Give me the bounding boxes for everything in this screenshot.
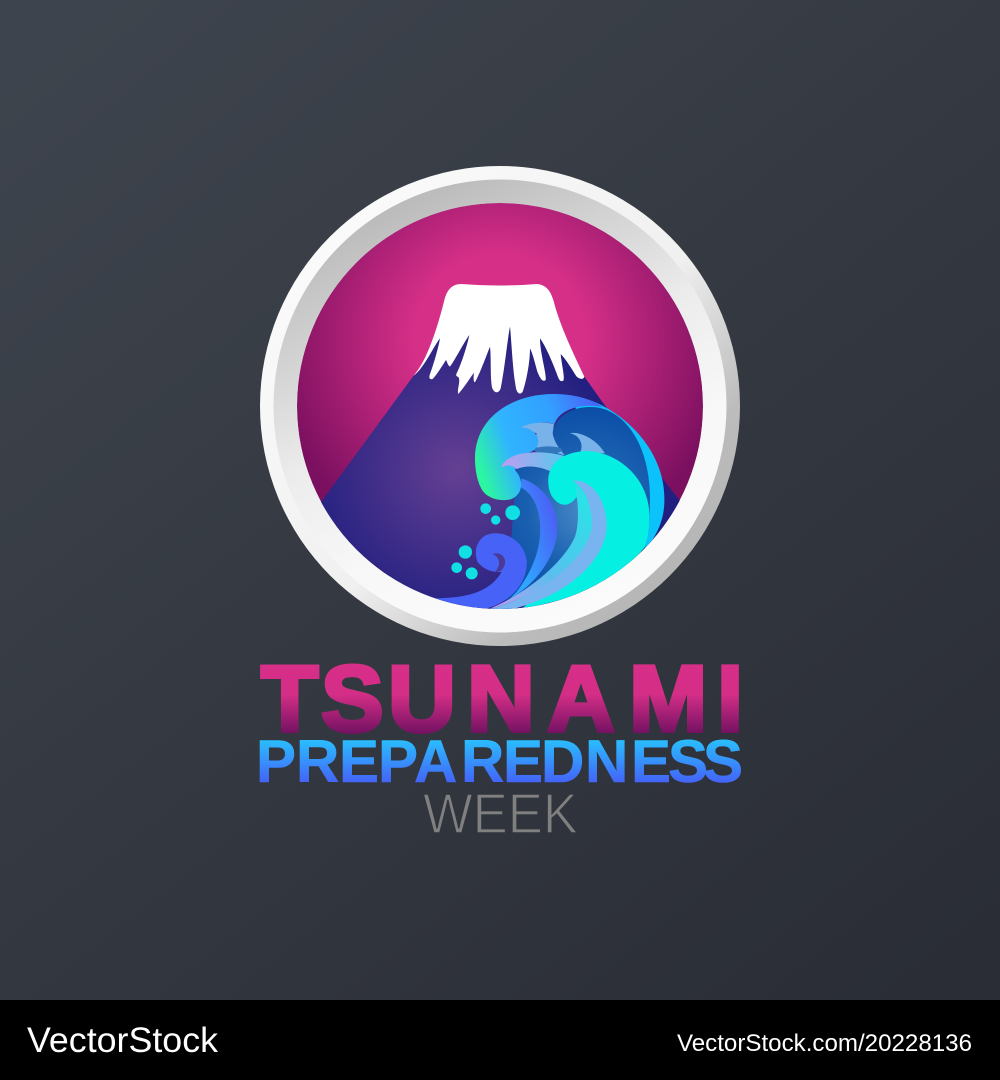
wave: small blue curl (433, 533, 527, 609)
spray dots (451, 503, 520, 579)
wave: lip shadow (534, 446, 562, 454)
wave: green to blue crest (475, 394, 603, 500)
wave: pale inner crest (570, 433, 605, 453)
wave: light blue strip (488, 481, 607, 609)
wave: front turquoise (520, 451, 649, 610)
snow cap (413, 284, 584, 394)
illustration disc (297, 203, 703, 637)
wave: deep blue body (507, 407, 650, 600)
footer brand: VectorStock (27, 1021, 219, 1060)
sky (297, 203, 703, 609)
title: preparedness: PREPAREDNESS (256, 728, 743, 795)
wave: turquoise strip (488, 484, 592, 609)
title: week: WEEK (423, 782, 578, 846)
footer image id: VectorStock.com/20228136 (677, 1030, 972, 1057)
wave: lavender band (501, 452, 567, 472)
title: tsunami: TSUNAMI (261, 646, 743, 751)
wave: pale lip inside (520, 423, 565, 455)
footer bar (0, 1000, 1000, 1080)
wave: back cyan edge (573, 396, 664, 550)
ring (260, 166, 740, 646)
wave: curl hollow (493, 553, 505, 572)
wave: middle blue band (510, 478, 557, 598)
badge (260, 166, 740, 646)
mountain (321, 326, 680, 609)
